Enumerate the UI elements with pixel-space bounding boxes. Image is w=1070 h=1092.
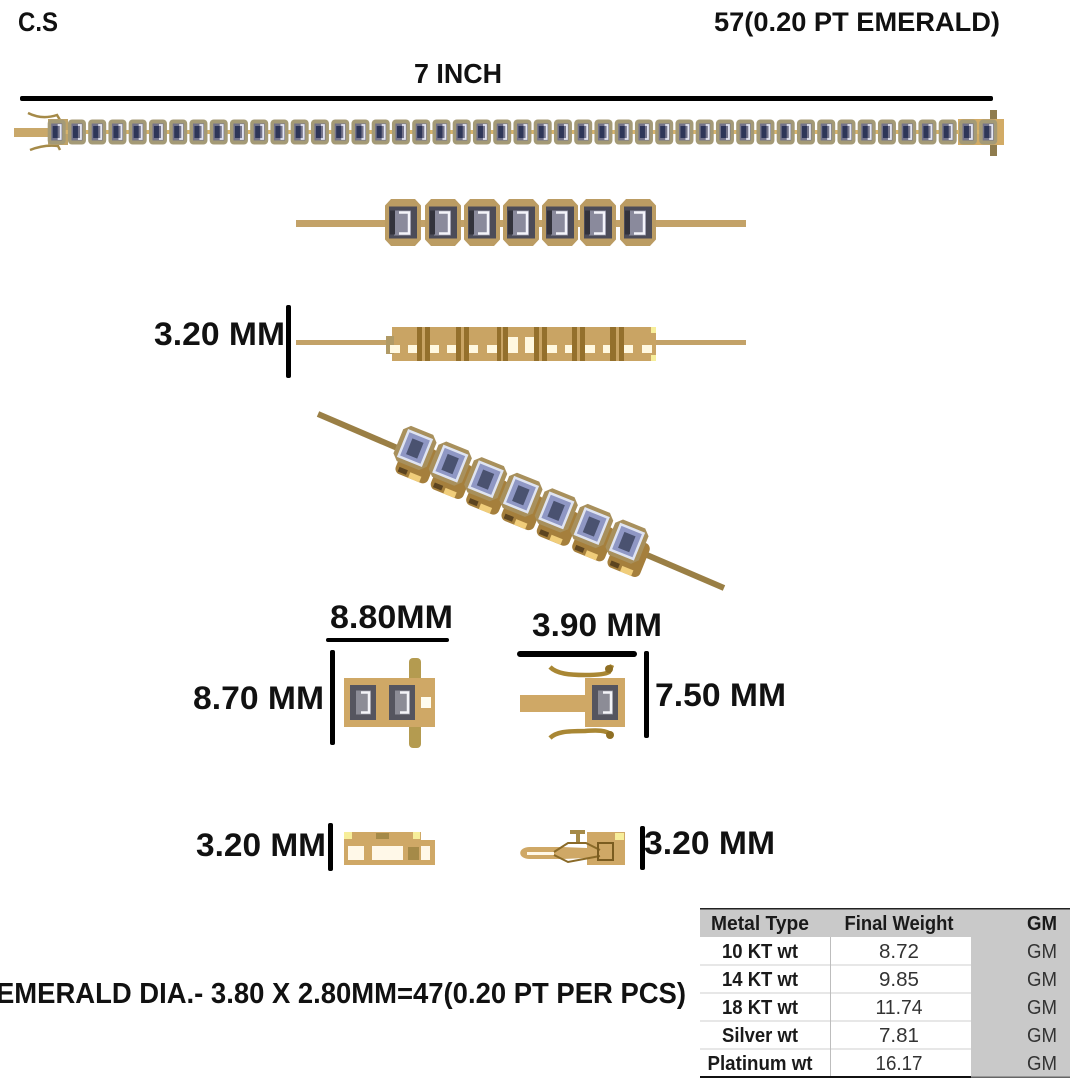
clasp box height dimension line: [328, 823, 333, 871]
seven stone section top view: [296, 199, 746, 246]
length dimension label: 7 INCH: [414, 58, 502, 89]
row: Platinum: Platinum wt: [708, 1053, 813, 1075]
row: Platinum: 16.17: [876, 1053, 922, 1075]
tongue height label: 7.50 MM: [655, 677, 786, 713]
metal weight table: [700, 908, 1070, 1078]
clasp box side view: [344, 832, 435, 865]
clasp height dimension line: [330, 650, 335, 745]
clasp tongue top view: [520, 665, 625, 739]
tongue side height label: 3.20 MM: [644, 825, 775, 861]
row: 14 KT: 14 KT wt: [722, 969, 798, 991]
table header: GM: [1027, 913, 1057, 935]
row: 18 KT: 11.74: [876, 997, 922, 1019]
tongue height dimension line: [644, 651, 649, 738]
tongue width label: 3.90 MM: [532, 607, 662, 643]
clasp width dimension line: [326, 638, 449, 642]
clasp height label: 8.70 MM: [193, 680, 324, 716]
row: Platinum: [708, 1053, 1057, 1075]
row: 10 KT: [722, 941, 1057, 963]
row: 14 KT: 9.85: [879, 969, 919, 991]
clasp box top view: [344, 658, 435, 748]
row: 18 KT: 18 KT wt: [722, 997, 798, 1019]
full bracelet top view: [14, 110, 1004, 156]
row: 10 KT: 10 KT wt: [722, 941, 798, 963]
side height dimension line: [286, 305, 291, 378]
stone specification label: 57(0.20 PT EMERALD): [714, 7, 1000, 37]
row: Silver: [722, 1025, 1057, 1047]
row: Platinum: GM: [1027, 1053, 1057, 1075]
row: 18 KT: [722, 997, 1057, 1019]
tongue side height dimension line: [640, 826, 645, 870]
row: 10 KT: GM: [1027, 941, 1057, 963]
row: 14 KT: GM: [1027, 969, 1057, 991]
table header: Final Weight: [844, 913, 954, 935]
table header: [711, 913, 1057, 935]
angled perspective view: [318, 414, 724, 588]
clasp box height label: 3.20 MM: [196, 827, 326, 863]
side height label: 3.20 MM: [154, 316, 285, 352]
clasp width label: 8.80MM: [330, 599, 453, 635]
row: 18 KT: GM: [1027, 997, 1057, 1019]
seven stone section side view: [296, 327, 746, 361]
row: Silver: 7.81: [879, 1025, 919, 1047]
row: 14 KT: [722, 969, 1057, 991]
clasp tongue side view: [520, 830, 625, 865]
row: 10 KT: 8.72: [879, 941, 919, 963]
tongue width dimension line: [517, 651, 637, 657]
emerald stone specification: EMERALD DIA.- 3.80 X 2.80MM=47(0.20 PT PER PCS): [0, 978, 686, 1010]
length dimension line: [20, 96, 993, 101]
row: Silver: GM: [1027, 1025, 1057, 1047]
stone count label: C.S: [18, 7, 58, 37]
table header: Metal Type: [711, 913, 809, 935]
row: Silver: Silver wt: [722, 1025, 798, 1047]
